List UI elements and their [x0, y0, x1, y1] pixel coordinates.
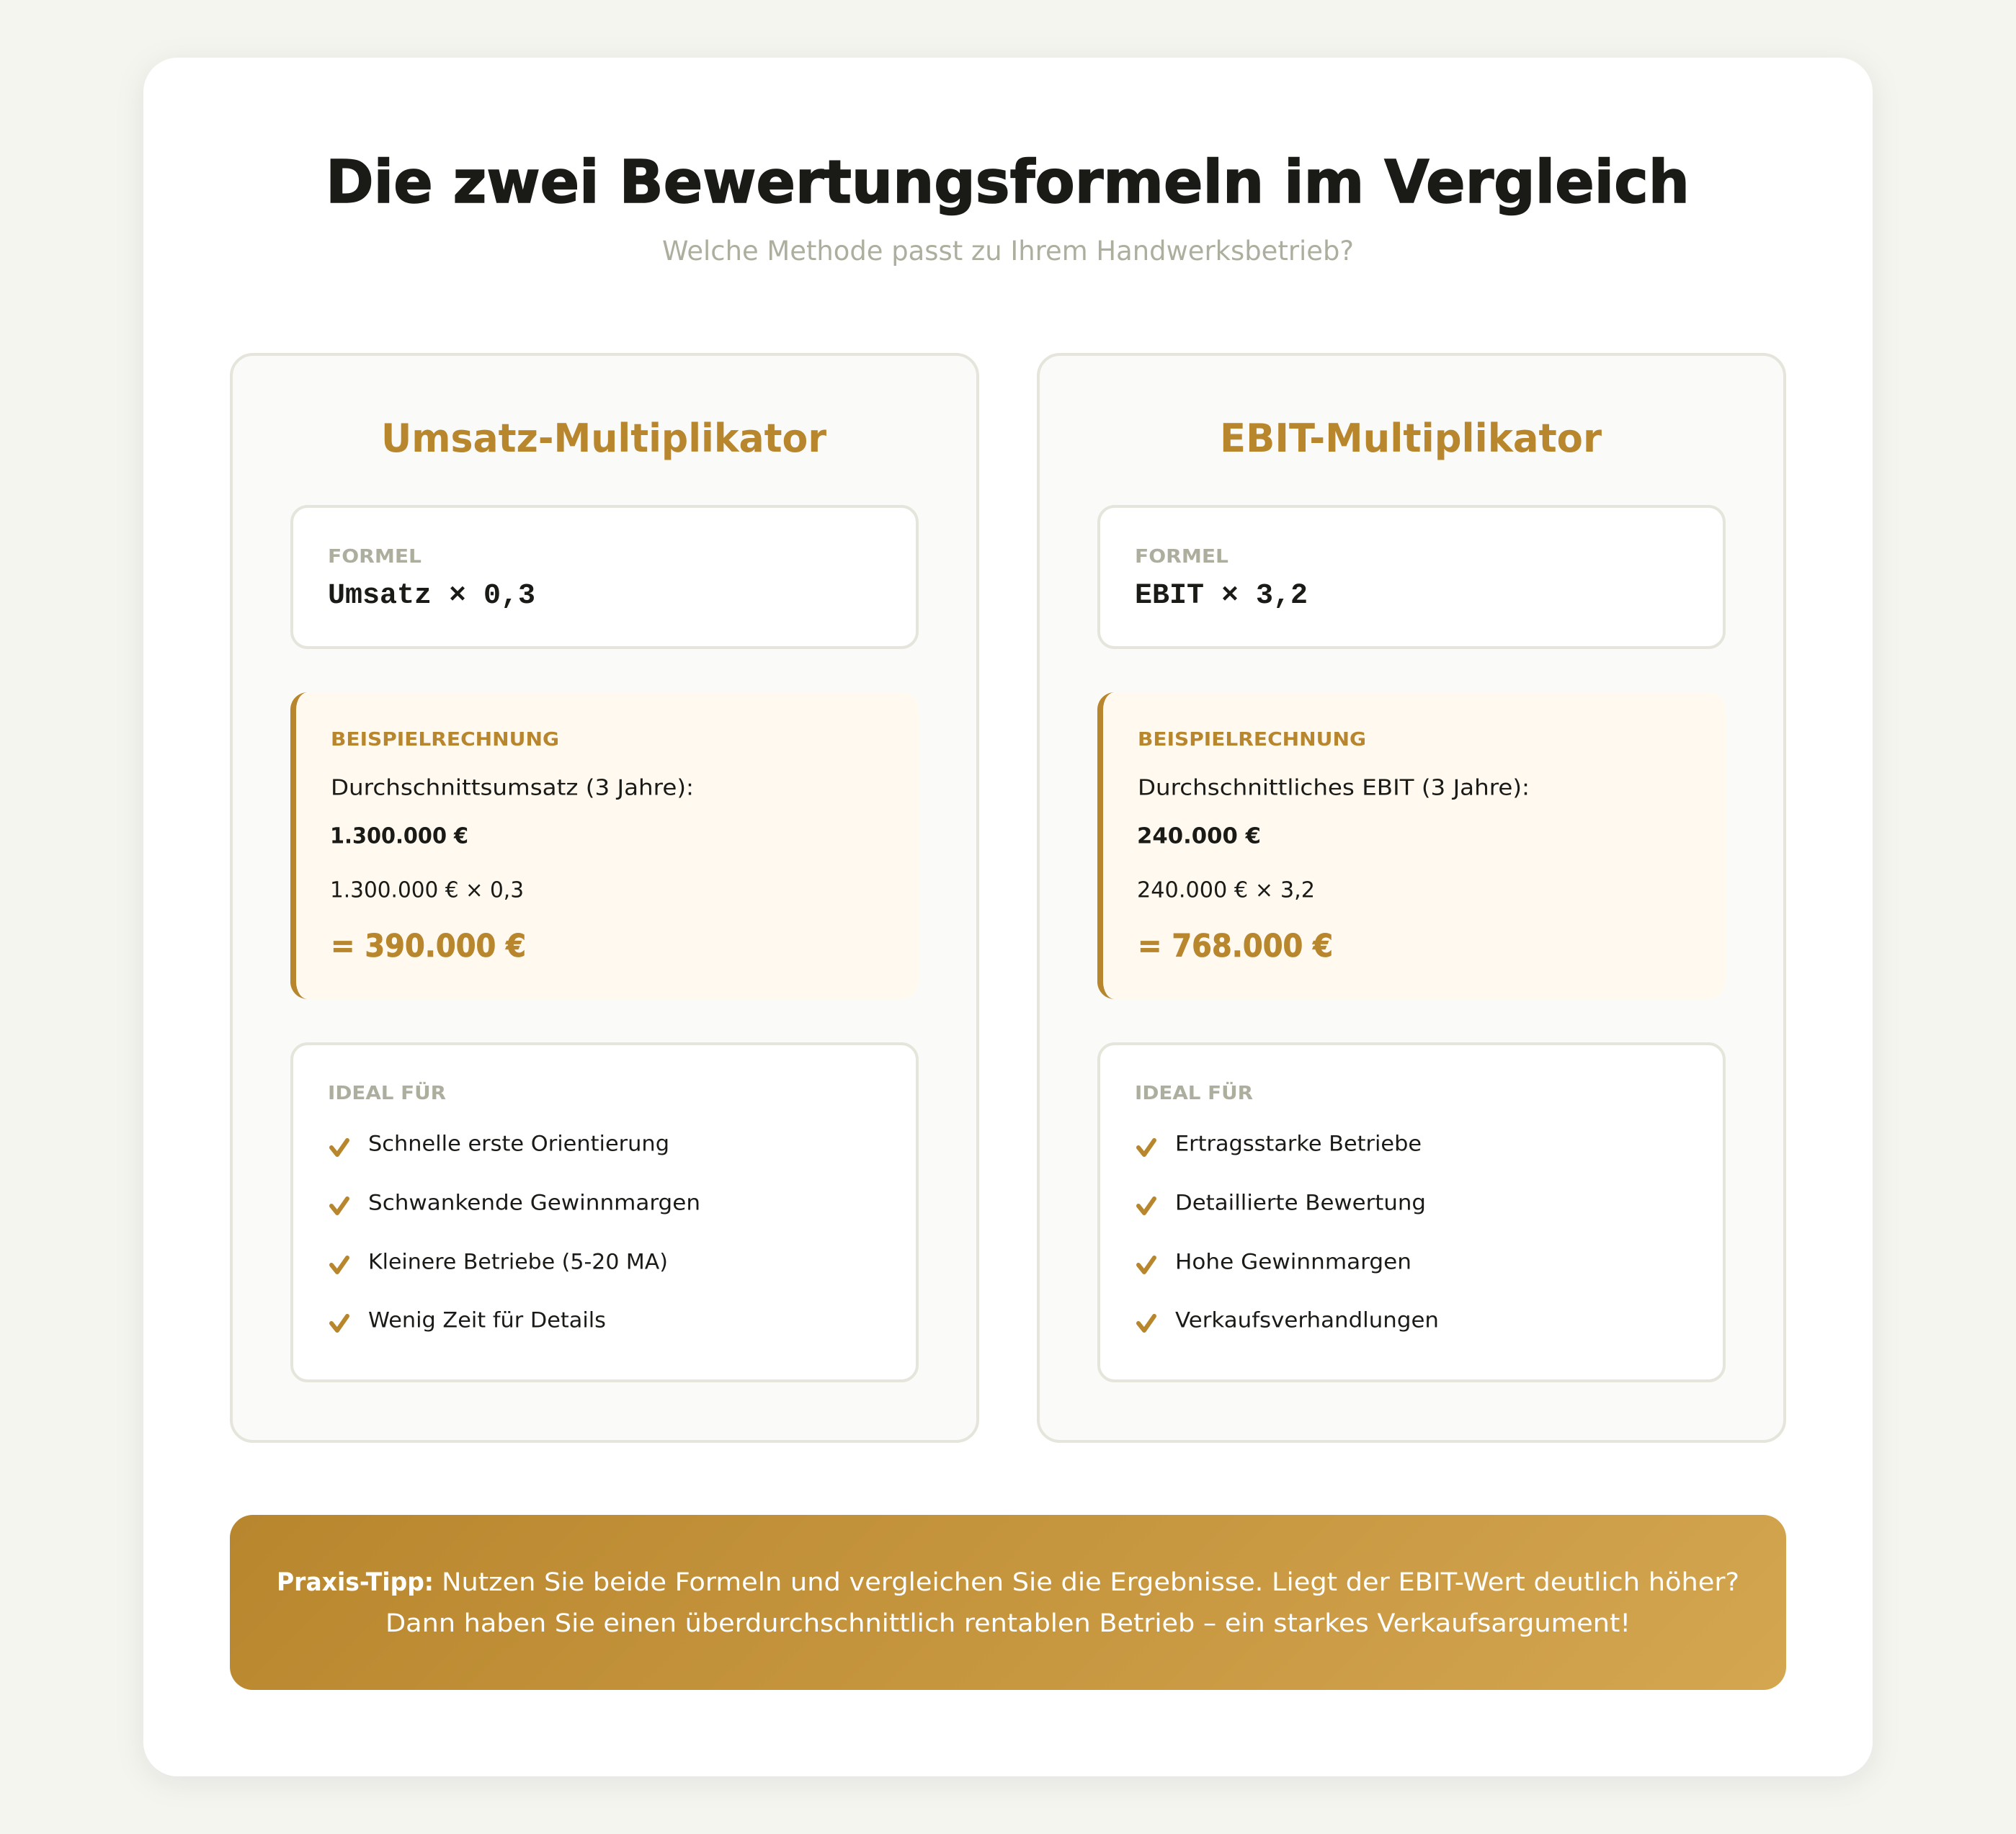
formula box [292, 506, 917, 648]
ideal-for list: IDEAL FÜR [1135, 1081, 1253, 1104]
example calculation box: BEISPIELRECHNUNG [1138, 729, 1366, 751]
example calculation box: BEISPIELRECHNUNG [331, 729, 559, 751]
callout: Praxis-Tipp: Nutzen Sie beide Formeln und vergleichen Sie die Ergebnisse. Liegt der EBIT-Wert deutlich höher? [442, 1568, 1739, 1597]
example calculation box: 240.000 € × 3,2 [1137, 877, 1315, 903]
formula box: EBIT × 3,2 [1135, 580, 1308, 612]
example calculation box: 1.300.000 € × 0,3 [330, 877, 524, 903]
example calculation box: = 390.000 € [331, 928, 526, 965]
ideal-for list: Verkaufsverhandlungen [1175, 1308, 1439, 1333]
example calculation box: 240.000 € [1137, 824, 1261, 849]
example calculation box: = 768.000 € [1138, 928, 1333, 965]
formula box: Umsatz × 0,3 [328, 580, 535, 612]
formula box [1099, 506, 1724, 648]
example calculation box: 1.300.000 € [330, 824, 468, 849]
ideal-for list [1099, 1044, 1724, 1381]
example calculation box: Durchschnittsumsatz (3 Jahre): [331, 775, 694, 801]
panel heading: Umsatz-Multiplikator [381, 416, 826, 461]
ideal-for list: Ertragsstarke Betriebe [1175, 1131, 1422, 1155]
example calculation box [290, 692, 919, 999]
ideal-for list: IDEAL FÜR [328, 1081, 446, 1104]
ideal-for list: Detaillierte Bewertung [1175, 1190, 1426, 1215]
callout: Praxis-Tipp: Dann haben Sie einen überdurchschnittlich rentablen Betrieb – ein starkes Verkaufsargument! [385, 1609, 1631, 1638]
ideal-for list: Wenig Zeit für Details [368, 1308, 606, 1333]
subtitle: Welche Methode passt zu Ihrem Handwerksbetrieb? [662, 236, 1354, 267]
example calculation box [1097, 692, 1726, 999]
panel: Umsatz-Multiplikator [231, 354, 978, 1441]
ideal-for list [292, 1044, 917, 1381]
ideal-for list: Kleinere Betriebe (5-20 MA) [368, 1249, 668, 1274]
ideal-for list: Hohe Gewinnmargen [1175, 1249, 1411, 1274]
panel: EBIT-Multiplikator [1038, 354, 1785, 1441]
panel heading: EBIT-Multiplikator [1220, 416, 1602, 461]
callout: Praxis-Tipp [230, 1515, 1786, 1690]
callout: Praxis-Tipp: Praxis-Tipp: [277, 1568, 434, 1597]
formula box: FORMEL [1135, 546, 1228, 568]
ideal-for list: Schwankende Gewinnmargen [368, 1190, 700, 1215]
ideal-for list: Schnelle erste Orientierung [368, 1131, 669, 1155]
title: Die zwei Bewertungsformeln im Vergleich [326, 148, 1690, 217]
formula box: FORMEL [328, 546, 422, 568]
example calculation box: Durchschnittliches EBIT (3 Jahre): [1138, 775, 1530, 801]
